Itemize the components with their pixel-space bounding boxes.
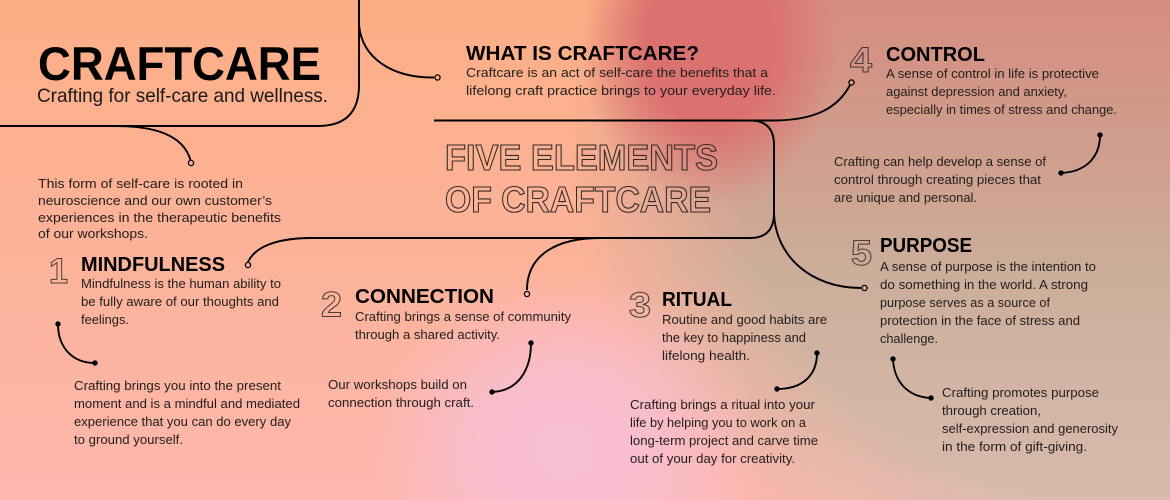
connector to connection [524,238,600,297]
mindfulness note: Crafting brings you into the present [74,378,281,393]
number 1: 1 [49,252,68,291]
element 3: ritual [629,286,827,466]
ritual note: Crafting brings a ritual into your [630,397,816,412]
ritual arrow [774,350,820,392]
element 5: purpose [774,213,1119,454]
purpose note: self-expression and generosity [942,421,1119,436]
ritual note: life by helping you to work on a [630,415,807,430]
control note: control through creating pieces that [834,172,1041,187]
purpose description: protection in the face of stress and [880,313,1080,328]
mindfulness heading: MINDFULNESS [81,254,225,276]
mindfulness note: experience that you can do every day [74,414,292,429]
ritual description: Routine and good habits are [662,312,827,327]
element 1: mindfulness [49,238,312,447]
control description [886,66,1117,117]
ritual note: long-term project and carve time [630,433,818,448]
element 2: connection [321,238,600,410]
ritual description: the key to happiness and [662,330,806,345]
number 3: 3 [629,286,651,325]
connection arrow [489,340,534,395]
purpose description: do something in the world. A strong [880,277,1088,292]
connection note: connection through craft. [328,395,474,410]
element 4: control [735,41,1117,205]
text block: intro [38,176,281,241]
connector: header to intro [115,126,194,166]
text block: what is craftcare: WHAT IS CRAFTCARE? [466,43,699,65]
text block: intro: experiences in the therapeutic benefits [38,210,281,225]
number 5: 5 [851,234,872,273]
heading: five elements of craftcare [445,137,718,220]
control arrow [1058,132,1103,176]
subtitle: Crafting for self-care and wellness. [37,85,328,107]
text block: what is craftcare: lifelong craft practice brings to your everyday life. [466,83,776,98]
text block: what is craftcare: Craftcare is an act of self-care the benefits that a [466,65,769,80]
connection description: through a shared activity. [355,327,500,342]
purpose note: through creation, [942,403,1041,418]
ritual description: lifelong health. [662,348,750,363]
ritual heading: RITUAL [662,289,732,311]
text block: intro: neuroscience and our own customer’s [38,193,272,208]
number 4: 4 [850,41,873,80]
connection heading: CONNECTION [355,286,494,308]
purpose note: in the form of gift-giving. [942,439,1087,454]
purpose description [880,259,1096,346]
purpose arrow [890,356,934,401]
title block [37,38,328,107]
connection description [355,309,572,342]
ritual description [662,312,827,363]
text block: what is craftcare [466,43,776,98]
control heading: CONTROL [886,44,985,66]
ritual note [630,397,818,466]
control note: Crafting can help develop a sense of [834,154,1046,169]
connection description: Crafting brings a sense of community [355,309,572,324]
connection note [328,377,474,410]
number 2: 2 [321,286,342,324]
connector: header to what is craftcare [359,0,440,80]
title: CRAFTCARE [38,38,321,91]
control note: are unique and personal. [834,190,977,205]
control description: especially in times of stress and change. [886,102,1117,117]
purpose note [942,385,1119,454]
connector to mindfulness [245,238,312,268]
header panel outline [0,0,359,126]
purpose description: challenge. [880,331,938,346]
panel outline: five elements [305,120,774,238]
connection note: Our workshops build on [328,377,467,392]
mindfulness description [81,276,281,327]
control note [834,154,1046,205]
mindfulness description: feelings. [81,312,129,327]
purpose description: A sense of purpose is the intention to [880,259,1096,274]
text block: intro: of our workshops. [38,226,148,241]
ritual note: out of your day for creativity. [630,451,795,466]
purpose description: purpose serves as a source of [880,295,1050,310]
control description: against depression and anxiety, [886,84,1067,99]
purpose heading: PURPOSE [880,235,972,257]
text block: intro: This form of self-care is rooted in [38,176,243,191]
connector to purpose [774,213,867,291]
mindfulness arrow [55,321,98,366]
connector to control [735,80,854,120]
heading: five elements of craftcare: FIVE ELEMENTS [445,137,718,178]
mindfulness note: to ground yourself. [74,432,183,447]
heading: five elements of craftcare: OF CRAFTCARE [445,179,711,220]
mindfulness description: Mindfulness is the human ability to [81,276,281,291]
mindfulness description: be fully aware of our thoughts and [81,294,279,309]
control description: A sense of control in life is protective [886,66,1099,81]
mindfulness note: moment and is a mindful and mediated [74,396,300,411]
mindfulness note [74,378,300,447]
purpose note: Crafting promotes purpose [942,385,1099,400]
